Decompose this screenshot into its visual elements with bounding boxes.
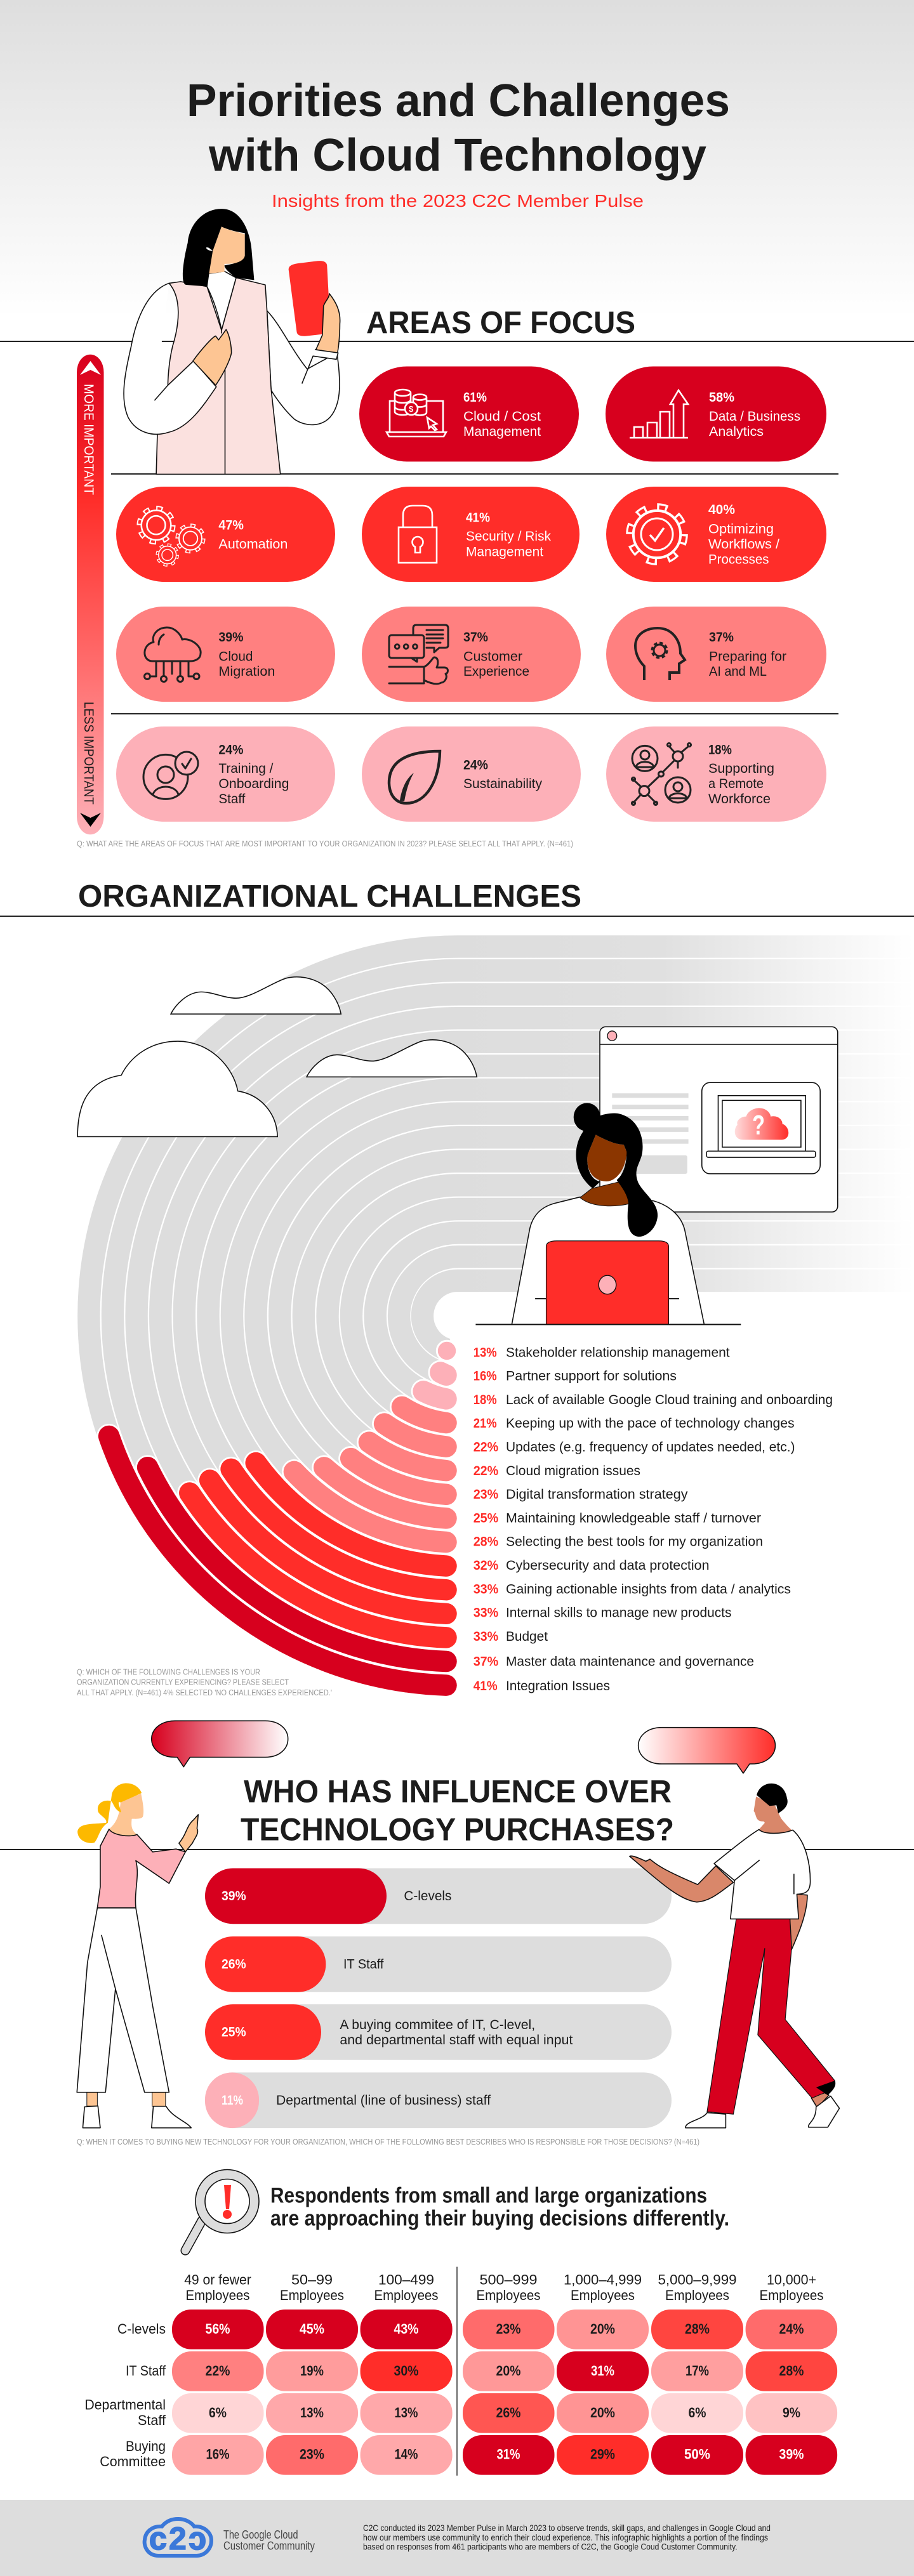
chart: influence bars: Departmental (line of business) staff xyxy=(276,2093,491,2108)
chart: influence bars: IT Staff xyxy=(343,1957,384,1972)
card: cloud cost management: Management xyxy=(463,424,541,439)
table: column headers: 500–999 xyxy=(480,2271,537,2287)
chart labels: challenges list: 18% xyxy=(474,1393,497,1407)
chart labels: challenges list: Partner support for solutions xyxy=(506,1369,677,1384)
chart labels: challenges list: Budget xyxy=(506,1629,548,1644)
footer description: C2C conducted its 2023 Member Pulse in March 2023 to observe trends, skill gaps, and challenges in Google Cloud and xyxy=(363,2523,771,2533)
card: sustainability: Sustainability xyxy=(463,777,543,791)
illustration: woman with tablet xyxy=(124,209,340,474)
chart: influence bars: 25% xyxy=(222,2025,246,2039)
card: training: Training / xyxy=(218,761,274,776)
footnote: challenges: ALL THAT APPLY. (N=461) 4% SELECTED 'NO CHALLENGES EXPERIENCED.' xyxy=(77,1688,332,1697)
illustration: woman pointing xyxy=(77,1783,198,2128)
card: cloud migration xyxy=(116,607,335,702)
icon: cloud circuit xyxy=(145,628,201,681)
icon: gear with check xyxy=(630,508,684,561)
chart: influence bars: 11% xyxy=(222,2093,243,2108)
title: Priorities and Challenges xyxy=(187,76,730,126)
card: preparing for AI: AI and ML xyxy=(709,664,767,679)
table: heatmap values: 9% xyxy=(783,2405,800,2421)
icon: padlock xyxy=(399,506,437,563)
illustration: speech bubbles xyxy=(152,1721,775,1773)
card: preparing for AI: Preparing for xyxy=(709,649,786,664)
card: cloud cost management: Cloud / Cost xyxy=(463,409,541,424)
card: remote workforce: Workforce xyxy=(708,792,771,806)
table: heatmap values xyxy=(206,2321,804,2462)
chart labels: challenges list: 33% xyxy=(474,1629,499,1644)
table: heatmap values: 24% xyxy=(779,2321,804,2337)
table: heatmap values: 13% xyxy=(300,2405,324,2421)
card: automation xyxy=(116,487,335,582)
head xyxy=(209,227,245,273)
table: heatmap cells xyxy=(172,2310,837,2475)
card: customer experience xyxy=(362,607,581,702)
card: sustainability xyxy=(362,726,581,822)
table: column headers xyxy=(184,2271,824,2303)
card: customer experience: Experience xyxy=(463,664,529,679)
card: sustainability: 24% xyxy=(463,758,488,773)
icon: laptop with coins xyxy=(387,390,446,437)
chart labels: challenges list: Lack of available Google Cloud training and onboarding xyxy=(506,1393,833,1407)
table: row labels: Buying xyxy=(126,2438,166,2454)
chart labels: challenges list: 41% xyxy=(474,1679,498,1693)
table: row labels: Staff xyxy=(138,2412,166,2428)
table: column headers: 50–99 xyxy=(291,2271,333,2287)
title xyxy=(187,76,730,181)
tablet xyxy=(289,261,331,336)
table: column headers: 49 or fewer xyxy=(184,2271,251,2287)
table: column headers: Employees xyxy=(759,2287,824,2303)
chart: background gray arcs xyxy=(89,947,914,1493)
table: heatmap values: 14% xyxy=(395,2447,418,2462)
subtitle: Insights from the 2023 C2C Member Pulse xyxy=(272,191,644,211)
card: data business analytics xyxy=(606,367,826,462)
table: heatmap values: 28% xyxy=(779,2363,804,2379)
table: heatmap values: 13% xyxy=(395,2405,418,2421)
table: column headers: Employees xyxy=(476,2287,541,2303)
table: heatmap values: 45% xyxy=(300,2321,324,2337)
heading: who has influence: WHO HAS INFLUENCE OVER xyxy=(244,1774,672,1810)
card: preparing for AI: 37% xyxy=(709,630,734,645)
card: cloud cost management: 61% xyxy=(463,390,487,405)
table: heatmap values: 19% xyxy=(300,2363,324,2379)
chart labels: challenges list: 33% xyxy=(474,1582,499,1596)
table: column headers: Employees xyxy=(665,2287,729,2303)
chart labels: challenges list: 21% xyxy=(474,1416,497,1431)
card: data business analytics: Data / Business xyxy=(709,409,800,424)
table: row labels: Committee xyxy=(100,2454,166,2469)
card: preparing for AI xyxy=(606,607,826,702)
chart labels: challenges list: Digital transformation strategy xyxy=(506,1487,688,1502)
hand right xyxy=(316,294,340,353)
icon: C2C logo xyxy=(145,2519,211,2556)
chart labels: challenges list: 16% xyxy=(474,1369,497,1384)
chart labels: challenges list: 13% xyxy=(474,1345,497,1360)
card: security: 41% xyxy=(466,510,490,525)
icon: person with check xyxy=(143,752,198,799)
footer description: how our members use community to enrich their cloud experience. This infographic highlights a portion of the findings xyxy=(363,2532,768,2542)
card: security xyxy=(362,487,580,582)
table: heatmap values: 39% xyxy=(779,2447,804,2462)
card: security: Security / Risk xyxy=(466,529,551,544)
footnote: areas of focus: Q: WHAT ARE THE AREAS OF FOCUS THAT ARE MOST IMPORTANT TO YOUR ORGANIZATION IN 2023? PLEASE SELECT ALL THAT APPLY. (N=461) xyxy=(77,839,573,848)
chart: influence bars: 26% xyxy=(222,1957,246,1972)
card: remote workforce: Supporting xyxy=(708,761,774,776)
chart labels: challenges list: 28% xyxy=(474,1535,499,1549)
icon: chat bubbles and thumb xyxy=(389,625,448,684)
card: cloud cost management xyxy=(359,367,579,462)
table: column headers: Employees xyxy=(280,2287,344,2303)
chart labels: challenges list xyxy=(474,1345,833,1693)
table: heatmap values: 56% xyxy=(206,2321,230,2337)
icon: C2C logo: 2 xyxy=(169,2521,187,2556)
heading: respondents: are approaching their buying decisions differently. xyxy=(270,2206,729,2230)
chart labels: challenges list: Master data maintenance and governance xyxy=(506,1654,754,1669)
card: cloud migration: Migration xyxy=(218,664,275,679)
chart: influence bars: A buying commitee of IT, C-level, xyxy=(340,2018,535,2032)
importance scale bar xyxy=(77,355,104,834)
table: heatmap values: 6% xyxy=(209,2405,227,2421)
card: optimizing workflows: Optimizing xyxy=(708,522,774,537)
card: cloud migration: 39% xyxy=(218,630,244,645)
card: training xyxy=(116,726,335,822)
card: training: Onboarding xyxy=(218,777,289,791)
icon: gears xyxy=(140,509,203,565)
illustration: man gesturing xyxy=(630,1784,839,2128)
importance scale bar: LESS IMPORTANT xyxy=(81,702,96,805)
footnote: challenges xyxy=(77,1667,332,1697)
table: column headers: 10,000+ xyxy=(767,2271,816,2287)
table: row labels: IT Staff xyxy=(126,2363,166,2379)
chart labels: challenges list: Keeping up with the pace of technology changes xyxy=(506,1416,795,1431)
heading: who has influence xyxy=(241,1774,674,1847)
icon: network of people xyxy=(632,743,691,805)
heading: respondents xyxy=(270,2184,729,2230)
icon: rising bars xyxy=(630,390,688,438)
card: training: 24% xyxy=(218,742,244,758)
table: heatmap values: 16% xyxy=(206,2447,230,2462)
title: with Cloud Technology xyxy=(208,130,706,181)
hand left xyxy=(193,329,232,385)
footer band xyxy=(0,2500,914,2576)
table: column headers: Employees xyxy=(185,2287,250,2303)
footer description xyxy=(363,2523,771,2552)
heading: who has influence: TECHNOLOGY PURCHASES? xyxy=(241,1811,674,1847)
card: security: Management xyxy=(466,545,543,560)
illustration: seated person at laptop xyxy=(475,1103,741,1324)
card: customer experience: 37% xyxy=(463,630,488,645)
chart: influence bars: and departmental staff with equal input xyxy=(340,2033,573,2047)
table: row labels xyxy=(84,2321,166,2469)
icon: C2C logo: c xyxy=(149,2521,167,2556)
chart labels: challenges list: 32% xyxy=(474,1558,499,1573)
card: cloud migration: Cloud xyxy=(218,649,253,664)
footnote: influence: Q: WHEN IT COMES TO BUYING NEW TECHNOLOGY FOR YOUR ORGANIZATION, WHICH OF THE FOLLOWING BEST DESCRIBES WHO IS RESPONSIBLE FOR THOSE DECISIONS? (N=461) xyxy=(77,2137,699,2146)
table: row labels: Departmental xyxy=(84,2397,166,2413)
table: heatmap values: 20% xyxy=(590,2405,615,2421)
icon: C2C logo: c xyxy=(189,2521,206,2556)
chart: colored radial bars xyxy=(109,1341,457,1685)
card: automation: Automation xyxy=(218,537,288,552)
table: heatmap values: 20% xyxy=(496,2363,520,2379)
illustration: clouds xyxy=(77,977,477,1136)
chart labels: challenges list: 33% xyxy=(474,1606,499,1620)
card: training: Staff xyxy=(218,792,246,806)
card: data business analytics: Analytics xyxy=(709,424,764,439)
card: automation: 47% xyxy=(218,518,244,533)
table: column headers: 100–499 xyxy=(378,2271,434,2287)
illustration: browser window with laptop xyxy=(600,1027,838,1212)
table: row labels: C-levels xyxy=(117,2321,166,2337)
table: heatmap values: 23% xyxy=(300,2447,324,2462)
card: optimizing workflows: Workflows / xyxy=(708,537,779,552)
chart labels: challenges list: Gaining actionable insights from data / analytics xyxy=(506,1582,791,1596)
chart labels: challenges list: Selecting the best tools for my organization xyxy=(506,1535,763,1549)
icon: laptop with coins: $ xyxy=(409,404,414,414)
card: data business analytics: 58% xyxy=(709,390,734,405)
icon: magnifier with exclamation mark xyxy=(185,2170,259,2251)
heading: areas of focus: AREAS OF FOCUS xyxy=(366,306,635,340)
chart: influence bars: C-levels xyxy=(404,1889,451,1903)
chart: influence bars xyxy=(205,1868,672,2128)
chart labels: challenges list: Cybersecurity and data protection xyxy=(506,1558,710,1573)
chart labels: challenges list: Internal skills to manage new products xyxy=(506,1606,731,1620)
chart labels: challenges list: 23% xyxy=(474,1487,499,1502)
footer description: based on responses from 461 participants who are members of C2C, the Google Coud Customer Community. xyxy=(363,2542,738,2552)
card: optimizing workflows: Processes xyxy=(708,552,769,567)
table: column headers: Employees xyxy=(571,2287,635,2303)
chart: influence bars: 39% xyxy=(222,1889,246,1903)
logo tagline: Customer Community xyxy=(223,2540,315,2553)
table: heatmap values: 17% xyxy=(686,2363,709,2379)
arrow up xyxy=(80,361,101,375)
chart labels: challenges list: Maintaining knowledgeable staff / turnover xyxy=(506,1511,761,1525)
card: remote workforce xyxy=(606,726,826,822)
table: heatmap values: 50% xyxy=(684,2447,710,2462)
table: column headers: 5,000–9,999 xyxy=(658,2271,736,2287)
header gradient background xyxy=(0,0,914,341)
chart labels: challenges list: Stakeholder relationship management xyxy=(506,1345,730,1360)
chart labels: challenges list: 37% xyxy=(474,1654,499,1669)
chart labels: challenges list: 22% xyxy=(474,1440,499,1454)
arrow down xyxy=(80,813,101,827)
card: remote workforce: 18% xyxy=(708,742,732,758)
table: column headers: 1,000–4,999 xyxy=(564,2271,642,2287)
chart labels: challenges list: Updates (e.g. frequency of updates needed, etc.) xyxy=(506,1440,795,1454)
table: heatmap values: 22% xyxy=(206,2363,230,2379)
table: heatmap values: 23% xyxy=(496,2321,520,2337)
table: heatmap values: 26% xyxy=(496,2405,520,2421)
heading: respondents: Respondents from small and large organizations xyxy=(270,2184,707,2208)
logo tagline xyxy=(223,2528,315,2553)
table: heatmap values: 20% xyxy=(590,2321,615,2337)
icon: head with gear xyxy=(635,628,685,680)
table: heatmap values: 29% xyxy=(590,2447,615,2462)
icon: leaf xyxy=(389,751,440,803)
table: heatmap values: 31% xyxy=(591,2363,614,2379)
chart labels: challenges list: 22% xyxy=(474,1464,499,1478)
table: heatmap values: 6% xyxy=(688,2405,706,2421)
table: heatmap values: 28% xyxy=(685,2321,710,2337)
table: heatmap values: 31% xyxy=(496,2447,520,2462)
chart labels: challenges list: 25% xyxy=(474,1511,499,1525)
card: optimizing workflows: 40% xyxy=(708,503,735,517)
logo tagline: The Google Cloud xyxy=(223,2528,298,2541)
heading: organizational challenges: ORGANIZATIONAL CHALLENGES xyxy=(78,879,581,914)
table: column headers: Employees xyxy=(374,2287,438,2303)
chart labels: challenges list: Integration Issues xyxy=(506,1679,610,1693)
table: heatmap values: 43% xyxy=(394,2321,419,2337)
footnote: challenges: ORGANIZATION CURRENTLY EXPERIENCING? PLEASE SELECT xyxy=(77,1678,289,1687)
card: optimizing workflows xyxy=(606,487,826,582)
chart labels: challenges list: Cloud migration issues xyxy=(506,1464,640,1478)
icon: question mark: ? xyxy=(752,1110,765,1141)
card: customer experience: Customer xyxy=(463,649,522,664)
footnote: challenges: Q: WHICH OF THE FOLLOWING CHALLENGES IS YOUR xyxy=(77,1667,260,1676)
card: remote workforce: a Remote xyxy=(708,777,764,791)
table: heatmap values: 30% xyxy=(394,2363,419,2379)
importance scale bar: MORE IMPORTANT xyxy=(81,384,96,495)
